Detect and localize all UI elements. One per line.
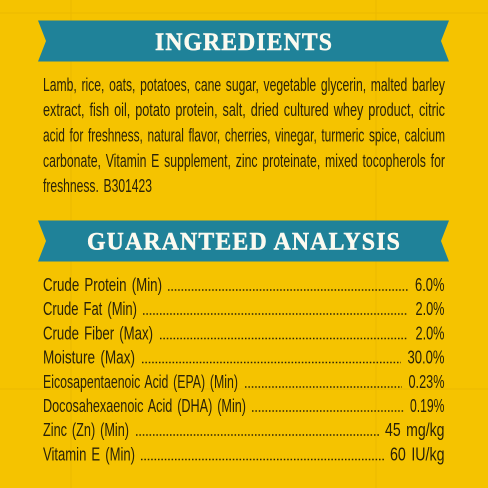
row: crude fat: Crude Fat (Min): [43, 299, 137, 319]
row: moisture: 30.0%: [408, 348, 444, 368]
heading: ingredients: INGREDIENTS: [155, 29, 333, 56]
text block: ingredients list: freshness. B301423: [43, 176, 152, 196]
row: crude fat: [43, 299, 444, 319]
row: moisture: [43, 348, 444, 368]
row: moisture: Moisture (Max): [43, 348, 135, 368]
row: zinc: [43, 420, 444, 440]
row: crude protein: [43, 275, 444, 295]
banner: guaranteed analysis: [38, 220, 449, 262]
row: EPA: Eicosapentaenoic Acid (EPA) (Min): [43, 372, 238, 392]
banner: ingredients: [38, 20, 449, 62]
row: crude fiber: [43, 324, 444, 344]
row: crude fiber: Crude Fiber (Max): [43, 324, 153, 344]
row: DHA: Docosahexaenoic Acid (DHA) (Min): [43, 396, 246, 416]
text block: ingredients list: [43, 75, 445, 196]
row: vitamin E: [43, 444, 444, 464]
row: vitamin E: Vitamin E (Min): [43, 444, 135, 464]
panel: ingredients: [38, 20, 449, 196]
row: crude fat: 2.0%: [416, 299, 444, 319]
panel: guaranteed analysis: [38, 220, 449, 464]
row: EPA: 0.23%: [408, 372, 444, 392]
heading: guaranteed analysis: GUARANTEED ANALYSIS: [87, 228, 401, 256]
row: crude fiber: 2.0%: [416, 324, 444, 344]
row: zinc: Zinc (Zn) (Min): [43, 420, 129, 440]
table: nutrient rows: [43, 275, 444, 464]
row: DHA: 0.19%: [410, 396, 444, 416]
row: zinc: 45 mg/kg: [385, 420, 444, 440]
row: crude protein: 6.0%: [415, 275, 444, 295]
row: crude protein: Crude Protein (Min): [43, 275, 162, 295]
row: vitamin E: 60 IU/kg: [390, 444, 444, 464]
